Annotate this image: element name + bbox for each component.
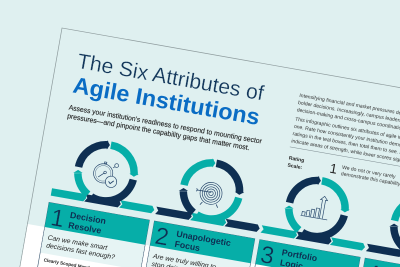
- card 2 number: 2: [153, 223, 171, 251]
- ring 1 with stopwatch icon: [69, 135, 144, 206]
- subtitle: pressures—and pinpoint the capability gaps that matter most.: [67, 112, 250, 152]
- rating description: demonstrate this capability.: [340, 171, 400, 188]
- rating number: 1: [328, 161, 338, 177]
- card 1: decision resolve: [28, 202, 149, 267]
- ring 3 with growth chart icon: [280, 171, 355, 242]
- card 1 number: 1: [49, 204, 66, 233]
- card 1 question: decisions fast enough?: [46, 242, 116, 261]
- subtitle: Assess your institution’s readiness to respond to mounting sector: [68, 104, 263, 146]
- title line two: Agile Institutions: [71, 72, 262, 130]
- ribbon band: [51, 188, 400, 264]
- card 4 header: [361, 258, 400, 267]
- rating scale label: Scale:: [287, 163, 303, 171]
- icon: target: [194, 180, 224, 208]
- rating scale label: Rating: [288, 155, 305, 164]
- ring 4 partial: [385, 189, 400, 259]
- card 3 header: [255, 240, 360, 267]
- card 3 title: Portfolio: [281, 247, 318, 263]
- card 1 header: [45, 202, 149, 245]
- card 1 title: Decision: [69, 210, 107, 226]
- title line one: The Six Attributes of: [75, 50, 266, 105]
- card 2 header: [150, 221, 255, 263]
- card 1 question background: [40, 227, 145, 267]
- card 4: [344, 258, 400, 267]
- card 2 title: Unapologetic: [176, 229, 232, 248]
- white lower area: [10, 224, 400, 267]
- intro text: [291, 93, 400, 172]
- rating description: We do not or very rarely: [341, 165, 396, 180]
- card 1 title: Resolve: [68, 220, 102, 236]
- title: [71, 50, 266, 130]
- rating scale: [286, 147, 400, 213]
- card 2 question background: [146, 246, 250, 267]
- icon: stopwatch: [92, 160, 120, 188]
- card 1 question: Can we make smart: [47, 235, 108, 252]
- card 2: unapologetic focus: [134, 221, 255, 267]
- icon: growth chart: [301, 193, 331, 220]
- card 3: portfolio logic: [239, 240, 360, 267]
- card 2 title: Focus: [174, 239, 201, 253]
- ring 2 with target icon: [175, 153, 249, 224]
